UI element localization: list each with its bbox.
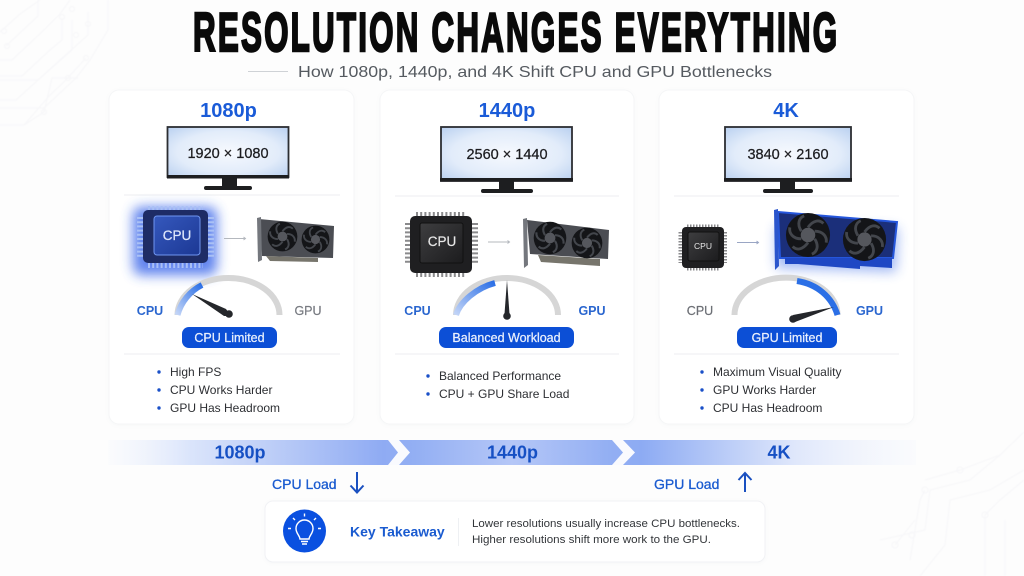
GPU load label with up arrow: GPU Load — [654, 476, 719, 492]
bullet list — [157, 365, 280, 415]
gauge: balanced — [404, 278, 606, 320]
panel: 1440p — [380, 90, 634, 424]
arrow: CPU to GPU — [224, 237, 246, 240]
CPU load label with down arrow: CPU Load — [272, 476, 337, 492]
gauge: GPU limited — [687, 278, 883, 323]
gauge: GPU limited: GPU — [856, 304, 883, 318]
monitor: 2560 x 1440 — [440, 127, 573, 193]
icon: glowing GPU card — [774, 209, 898, 272]
CPU load label with down arrow — [272, 472, 364, 492]
panel: 1080p — [109, 90, 354, 424]
bullet list — [426, 369, 569, 401]
gauge: CPU limited: GPU — [294, 304, 322, 318]
badge: CPU Limited — [182, 327, 277, 348]
heading: 1440p: 1440p — [479, 100, 535, 122]
callout: key takeaway — [265, 501, 765, 562]
subtitle: How 1080p, 1440p, and 4K Shift CPU and GPU Bottlenecks — [298, 64, 772, 81]
chevron 2 — [612, 440, 635, 465]
bullet list: CPU Works Harder — [170, 383, 272, 397]
icon: CPU chip glowing — [133, 207, 217, 275]
resolution progress bar: 1440p — [487, 442, 538, 462]
badge: Balanced Workload: Balanced Workload — [452, 331, 561, 345]
gauge: balanced: CPU — [404, 304, 431, 318]
circuit pattern top left — [0, 0, 108, 125]
gauge: CPU limited: CPU — [137, 304, 163, 318]
heading: 1080p: 1080p — [200, 100, 257, 122]
bullet list: Maximum Visual Quality — [713, 365, 841, 379]
takeaway text: Higher resolutions shift more work to the GPU. — [472, 534, 711, 546]
badge: Balanced Workload — [439, 327, 574, 348]
resolution progress bar — [108, 440, 916, 465]
heading: 4K: 4K — [773, 100, 799, 122]
gauge: GPU limited: CPU — [687, 304, 713, 318]
bullet list: CPU + GPU Share Load — [439, 387, 569, 401]
GPU load label with up arrow — [654, 473, 752, 492]
icon: GPU card — [523, 218, 609, 268]
gauge: balanced: GPU — [578, 304, 606, 318]
takeaway text: Lower resolutions usually increase CPU bottlenecks. — [472, 518, 740, 530]
badge: GPU Limited — [737, 327, 837, 348]
heading: key takeaway: Key Takeaway — [350, 524, 445, 540]
icon: CPU chip glowing: CPU — [163, 228, 191, 243]
bullet list: Balanced Performance — [439, 369, 561, 383]
gauge: CPU limited — [137, 278, 322, 318]
badge: GPU Limited: GPU Limited — [752, 331, 822, 345]
icon: CPU chip: CPU — [428, 234, 456, 249]
bullet list: High FPS — [170, 365, 221, 379]
bullet list: GPU Works Harder — [713, 383, 816, 397]
arrow: CPU to GPU — [737, 241, 758, 244]
icon: small CPU chip: CPU — [694, 241, 712, 251]
icon: GPU card — [257, 217, 334, 262]
monitor: 1920 x 1080: 1920 × 1080 — [187, 146, 269, 162]
panel: 4K — [659, 90, 914, 424]
icon: light bulb — [283, 510, 326, 552]
resolution progress bar: 1080p — [214, 442, 266, 462]
icon: CPU chip — [408, 214, 475, 274]
circuit pattern bottom right — [880, 432, 1024, 576]
bullet list: CPU Has Headroom — [713, 401, 822, 415]
arrow: CPU to GPU — [488, 240, 510, 244]
chevron 1 — [388, 440, 410, 465]
bullet list: GPU Has Headroom — [170, 401, 280, 415]
bullet list — [700, 365, 841, 415]
title: RESOLUTION CHANGES EVERYTHING — [193, 2, 837, 63]
monitor: 1920 x 1080 — [167, 127, 289, 190]
icon: small CPU chip — [680, 226, 725, 269]
monitor: 3840 x 2160 — [724, 127, 852, 193]
resolution progress bar: 4K — [767, 442, 791, 462]
monitor: 3840 x 2160: 3840 × 2160 — [747, 147, 829, 163]
badge: CPU Limited: CPU Limited — [194, 331, 265, 345]
monitor: 2560 x 1440: 2560 × 1440 — [466, 147, 548, 163]
takeaway text — [472, 518, 740, 546]
